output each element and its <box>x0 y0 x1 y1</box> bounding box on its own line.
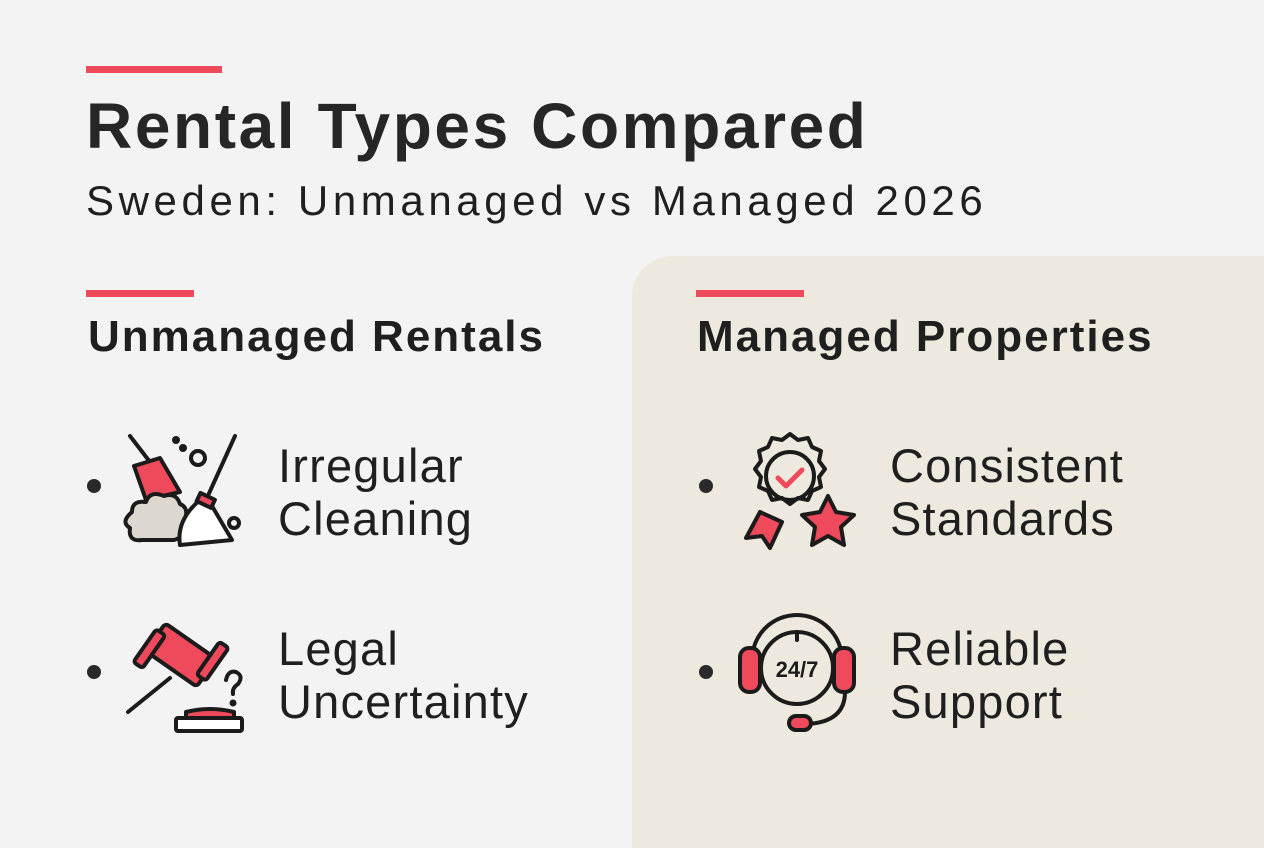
icon: headset 24/7: 24/7 <box>776 657 818 682</box>
text: legal uncertainty: Legal <box>278 622 399 675</box>
text: consistent standards: Standards <box>890 492 1115 545</box>
text: irregular cleaning <box>278 439 473 545</box>
text: consistent standards <box>890 439 1124 545</box>
bullet dots <box>87 479 713 679</box>
icon: award <box>746 434 854 548</box>
text: consistent standards: Consistent <box>890 439 1124 492</box>
text: legal uncertainty <box>278 622 529 728</box>
text: irregular cleaning: Cleaning <box>278 492 473 545</box>
text: irregular cleaning: Irregular <box>278 439 464 492</box>
heading: managed: Managed Properties <box>697 312 1154 361</box>
panel: managed content <box>696 290 1154 361</box>
panel: managed background <box>632 256 1264 848</box>
text: reliable support <box>890 622 1069 728</box>
text: reliable support: Support <box>890 675 1063 728</box>
icon: gavel <box>128 623 242 731</box>
icon: cleaning <box>125 436 239 545</box>
subtitle: Sweden: Unmanaged vs Managed 2026 <box>86 177 987 224</box>
text: legal uncertainty: Uncertainty <box>278 675 529 728</box>
text: reliable support: Reliable <box>890 622 1069 675</box>
heading: unmanaged: Unmanaged Rentals <box>88 312 545 361</box>
managed accent bar <box>696 290 804 297</box>
unmanaged accent bar <box>86 290 194 297</box>
title: Rental Types Compared <box>86 90 868 162</box>
title accent bar <box>86 66 222 73</box>
panel: unmanaged <box>86 290 545 361</box>
icon: headset 24/7 <box>740 615 854 730</box>
